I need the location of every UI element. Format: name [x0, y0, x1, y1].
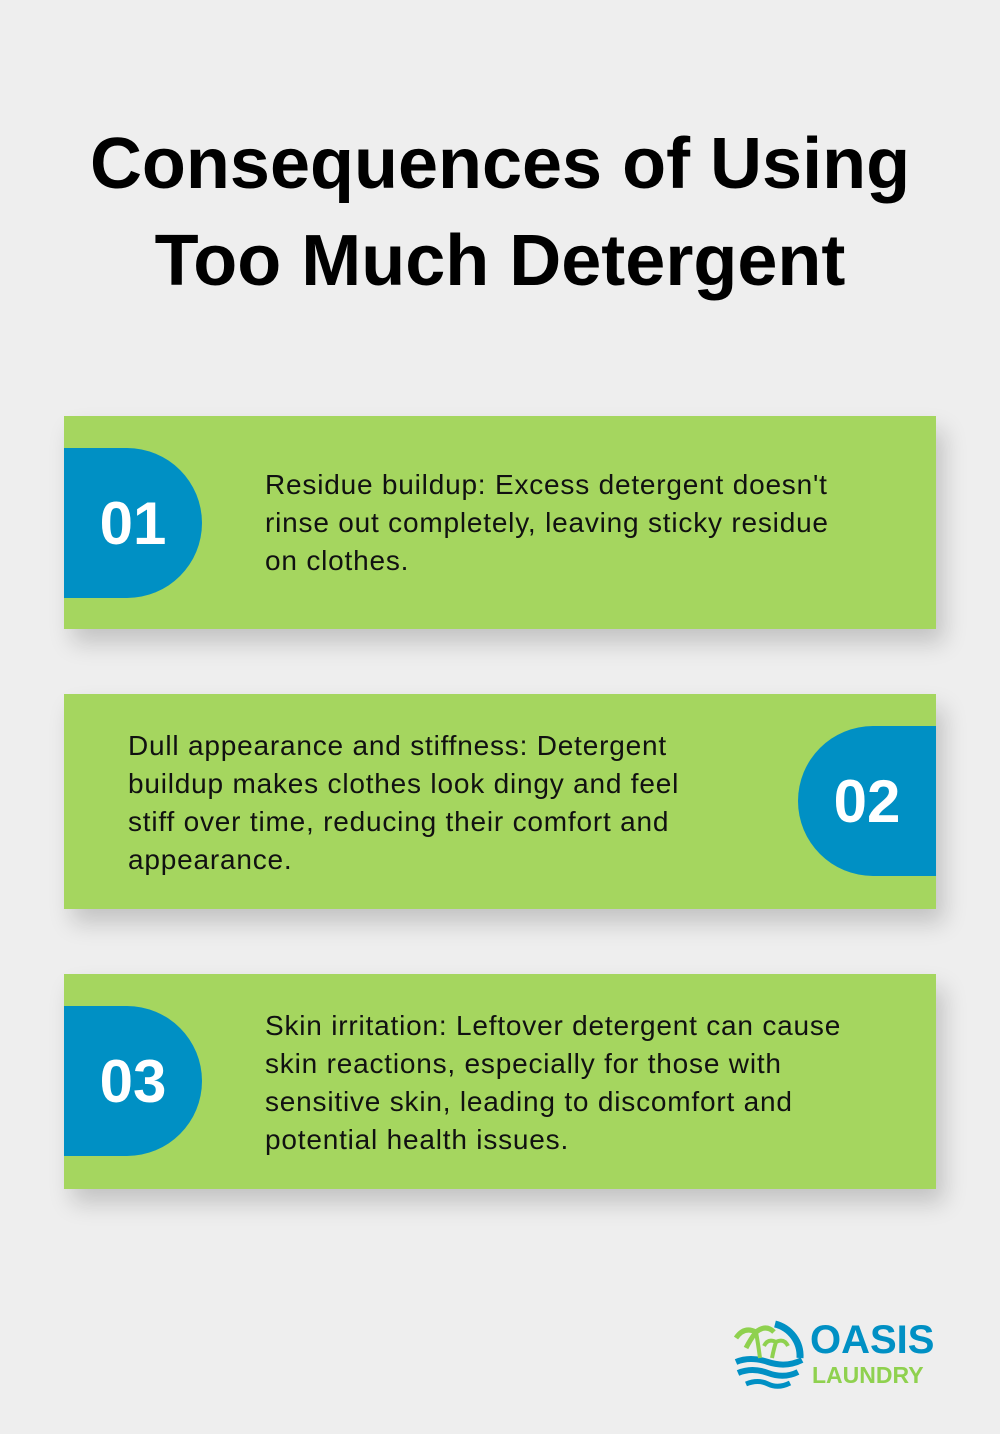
text 02: appearance. — [128, 844, 292, 875]
text 01 — [265, 469, 829, 576]
text 02 — [128, 730, 679, 875]
text 01: rinse out completely, leaving sticky residue — [265, 507, 829, 538]
text 01: Residue buildup: Excess detergent doesn't — [265, 469, 828, 500]
panel: item 02 — [64, 694, 936, 909]
text 02: stiff over time, reducing their comfort and — [128, 806, 669, 837]
panel: item 01 — [64, 416, 936, 629]
badge 03: 03 — [100, 1048, 166, 1114]
text 02: Dull appearance and stiffness: Detergent — [128, 730, 667, 761]
text 03 — [265, 1010, 841, 1155]
logo icon — [734, 1320, 804, 1389]
title: Consequences of Using — [90, 124, 910, 204]
text 03: skin reactions, especially for those with — [265, 1048, 782, 1079]
badge 01 — [64, 448, 202, 598]
badge 01: 01 — [100, 490, 166, 556]
text 03: potential health issues. — [265, 1124, 569, 1155]
logo — [734, 1318, 934, 1389]
badge 02 — [798, 726, 936, 876]
text 03: Skin irritation: Leftover detergent can cause — [265, 1010, 841, 1041]
badge 02: 02 — [834, 768, 900, 834]
logo: LAUNDRY — [812, 1362, 924, 1388]
text 03: sensitive skin, leading to discomfort and — [265, 1086, 793, 1117]
text 02: buildup makes clothes look dingy and feel — [128, 768, 679, 799]
title: Too Much Detergent — [155, 221, 845, 301]
panel: item 03 — [64, 974, 936, 1189]
text 01: on clothes. — [265, 545, 409, 576]
title — [90, 124, 910, 301]
logo text: OASIS — [810, 1318, 934, 1362]
badge 03 — [64, 1006, 202, 1156]
